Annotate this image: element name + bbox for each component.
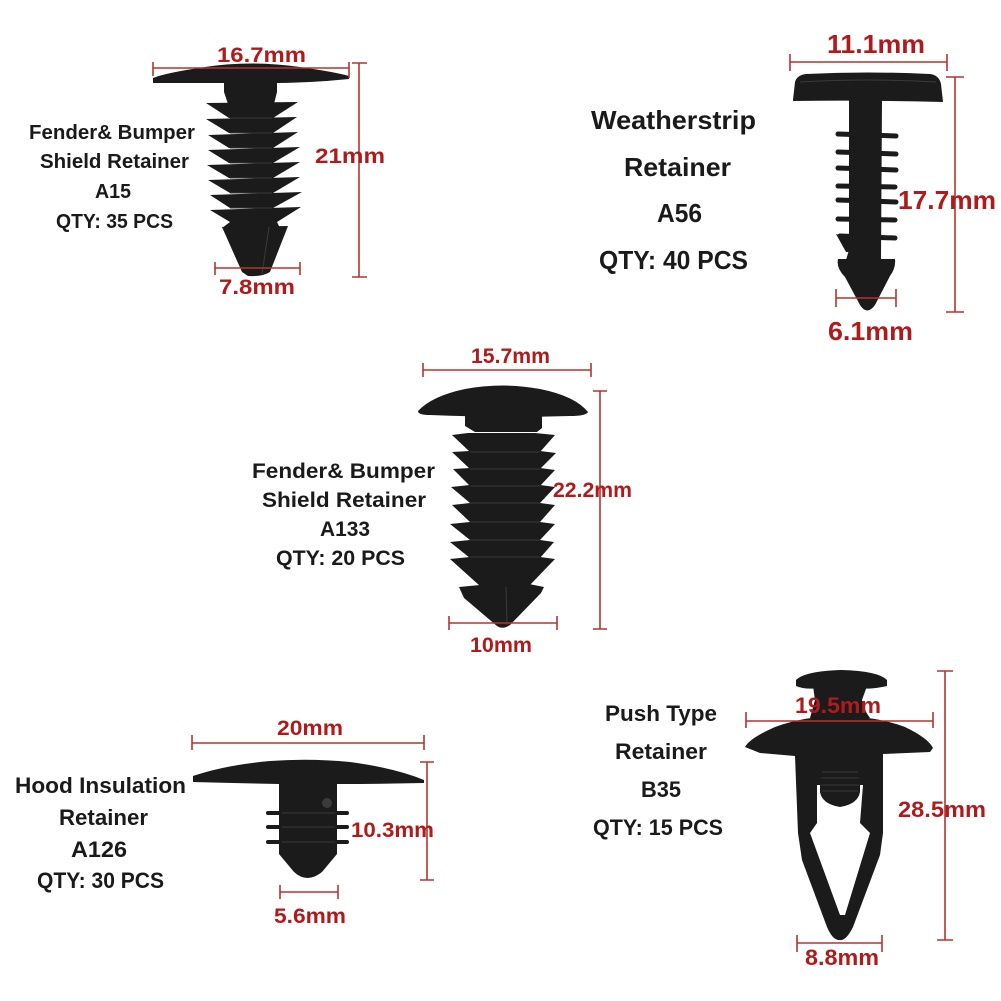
dimension labels B35: 19.5mm (795, 693, 881, 718)
label A15: QTY: 35 PCS (56, 211, 173, 233)
label A126: A126 (71, 837, 127, 862)
dimension labels B35: 8.8mm (805, 945, 879, 970)
label A56: QTY: 40 PCS (599, 245, 748, 275)
clip B35 (745, 670, 933, 940)
dimension labels A15: 7.8mm (219, 276, 295, 299)
dimension labels B35 (795, 693, 986, 970)
dimension labels A133: 10mm (470, 634, 532, 657)
clip A133 (418, 386, 588, 628)
label A56 (591, 105, 756, 275)
label B35: B35 (641, 777, 681, 802)
dimension labels A126: 20mm (277, 717, 343, 740)
dimension labels A126: 5.6mm (274, 905, 346, 928)
dimension labels A126: 10.3mm (351, 819, 434, 842)
dimension labels A133: 22.2mm (553, 479, 632, 502)
label A126: Retainer (59, 805, 148, 830)
dimension labels A56: 11.1mm (827, 29, 925, 59)
clip A56 (793, 72, 943, 310)
dimension labels A126 (274, 717, 434, 928)
dimension labels A56 (827, 29, 996, 346)
clip A126 (193, 760, 424, 878)
label A133: Shield Retainer (262, 489, 426, 512)
label B35: Retainer (615, 739, 707, 764)
label A56: Weatherstrip (591, 105, 756, 135)
dimension labels A15 (217, 44, 385, 299)
dimension labels A133: 15.7mm (471, 345, 550, 368)
label A133: QTY: 20 PCS (276, 547, 405, 570)
clip A15 (153, 64, 349, 276)
dimension lines A56 (790, 54, 964, 312)
label A126: Hood Insulation (15, 773, 186, 798)
dimension lines A126 (192, 735, 434, 899)
label B35: QTY: 15 PCS (593, 815, 723, 840)
label A56: Retainer (624, 152, 731, 182)
label A15 (29, 122, 195, 233)
dimension labels A56: 6.1mm (828, 316, 913, 346)
label B35 (593, 701, 723, 840)
label A126 (15, 773, 186, 893)
dimension labels A15: 21mm (315, 145, 385, 168)
dimension labels A15: 16.7mm (217, 44, 306, 67)
label A15: Fender& Bumper (29, 122, 195, 144)
dimension labels A56: 17.7mm (898, 185, 996, 215)
label A15: Shield Retainer (40, 151, 189, 173)
dimension labels B35: 28.5mm (898, 797, 986, 822)
dimension lines B35 (746, 671, 953, 952)
label A133: A133 (320, 518, 370, 541)
dimension labels A133 (470, 345, 632, 657)
label A56: A56 (657, 198, 702, 228)
label A133 (252, 460, 435, 570)
label A15: A15 (95, 181, 131, 203)
label B35: Push Type (605, 701, 717, 726)
dimension lines A133 (423, 363, 607, 630)
label A133: Fender& Bumper (252, 460, 435, 483)
dimension lines A15 (153, 62, 367, 277)
label A126: QTY: 30 PCS (37, 868, 164, 893)
